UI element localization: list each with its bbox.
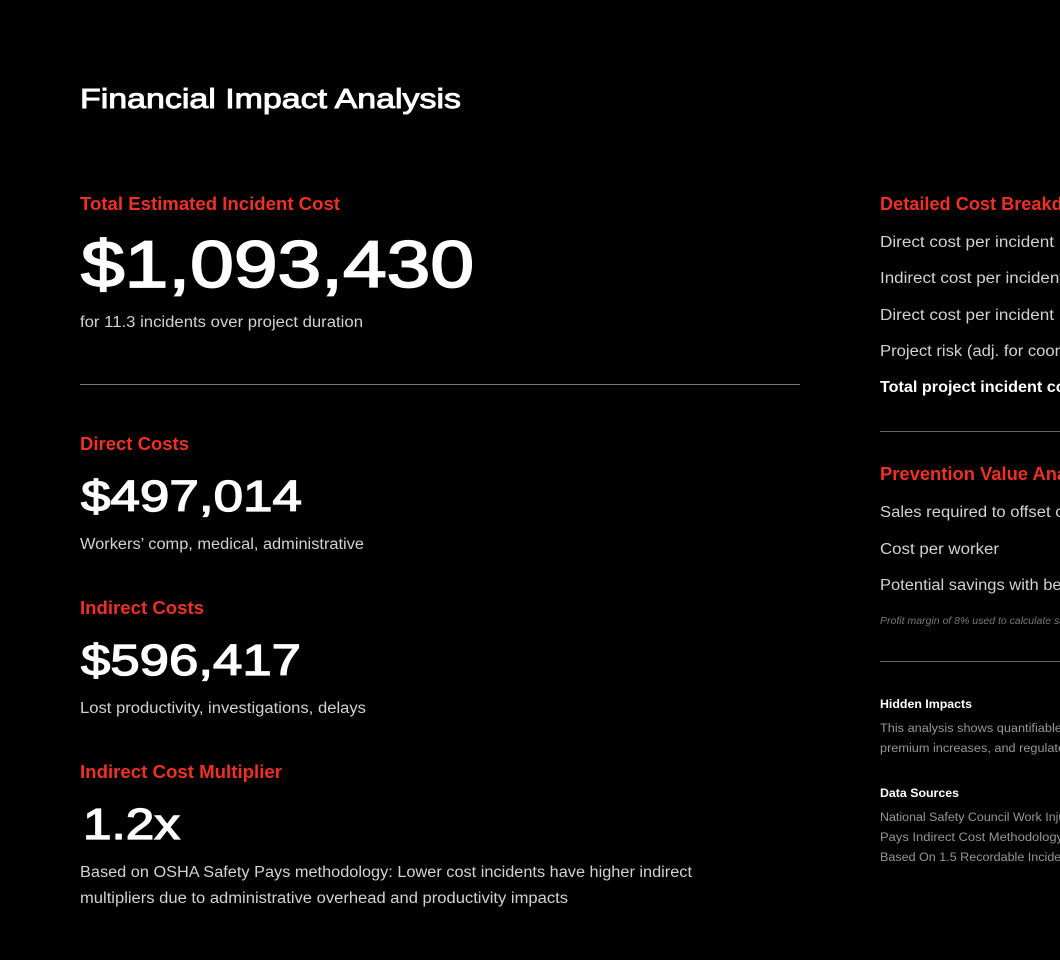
- direct costs block: [80, 434, 364, 553]
- panel: right column details: [880, 194, 1060, 864]
- value: indirect costs: $596,417: [81, 636, 301, 685]
- hidden impacts note: [880, 699, 1060, 755]
- detailed cost breakdown table: [880, 194, 1060, 396]
- caption: indirect costs: Lost productivity, investigations, delays: [80, 700, 366, 717]
- title: Financial Impact Analysis: [80, 83, 461, 114]
- indirect cost multiplier block: [80, 762, 693, 907]
- panel: left column cost summary: [80, 194, 800, 907]
- body: data sources: [880, 812, 1060, 864]
- value: direct costs: $497,014: [81, 472, 302, 521]
- row: direct cost per incident: Direct cost per incident: [880, 234, 1055, 251]
- value: total cost: $1,093,430: [81, 227, 474, 301]
- caption: direct costs: Workers’ comp, medical, administrative: [80, 536, 364, 553]
- data sources note: [880, 788, 1060, 864]
- total estimated incident cost block: [80, 194, 474, 331]
- description: multiplier: [80, 864, 693, 907]
- value: multiplier: 1.2x: [83, 800, 180, 849]
- heading: indirect costs: Indirect Costs: [80, 598, 204, 618]
- description: multiplier: Based on OSHA Safety Pays methodology: Lower cost incidents have higher indirect: [80, 864, 693, 881]
- heading: total cost: Total Estimated Incident Cost: [80, 194, 340, 214]
- heading: data sources: Data Sources: [880, 788, 959, 800]
- description: multiplier: multipliers due to administrative overhead and productivity impacts: [80, 890, 568, 907]
- heading: hidden impacts: Hidden Impacts: [880, 699, 972, 711]
- heading: multiplier: Indirect Cost Multiplier: [80, 762, 282, 782]
- caption: total cost: for 11.3 incidents over project duration: [80, 314, 363, 331]
- body: data sources: Based On 1.5 Recordable Incidents: [880, 852, 1060, 864]
- row: indirect cost per incident: Indirect cost per incident: [880, 270, 1060, 287]
- row: direct cost per incident repeat: Direct cost per incident: [880, 307, 1055, 324]
- heading: direct costs: Direct Costs: [80, 434, 189, 454]
- row: cost per worker: Cost per worker: [880, 541, 999, 558]
- indirect costs block: [80, 598, 366, 717]
- prevention value analysis table: [880, 464, 1060, 627]
- body: hidden impacts: [880, 723, 1060, 755]
